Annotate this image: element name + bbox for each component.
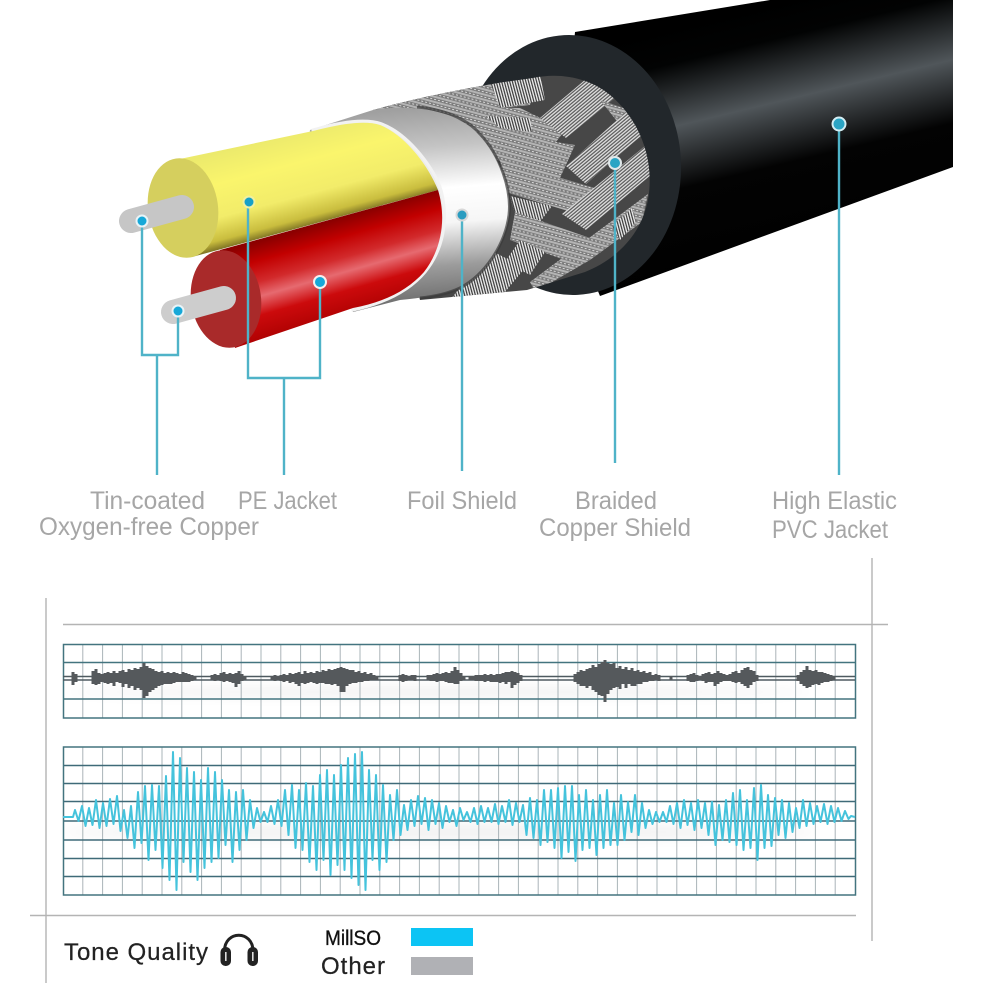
jacket end ring [454, 29, 688, 301]
callout: tin-coated copper [136, 216, 184, 475]
label: braided copper shield [539, 487, 691, 542]
red conductor [185, 190, 442, 352]
callout: PVC jacket [832, 118, 846, 475]
callout: PE jacket [244, 196, 326, 475]
foil shield [300, 108, 509, 312]
chart: other cable waveform [63, 644, 856, 718]
tinned wire top [131, 207, 182, 221]
label: PVC jacket: PVC Jacket [772, 516, 888, 544]
label: tin-coated copper: Tin-coated [90, 487, 205, 515]
chart: MillISO cable waveform [60, 747, 856, 895]
yellow end face [141, 154, 225, 262]
label: braided copper shield: Copper Shield [539, 514, 691, 542]
braided copper shield [373, 76, 650, 300]
cable cross-section illustration [131, 0, 953, 352]
callout: braided shield [609, 157, 621, 463]
callout lines and dots [136, 118, 846, 475]
cyan waveform [63, 752, 855, 890]
label: PVC jacket: High Elastic [772, 487, 897, 515]
tone quality heading: Tone Quality [64, 939, 208, 966]
legend row [64, 927, 473, 980]
PVC jacket body [560, 0, 953, 296]
component labels [39, 487, 897, 544]
dark waveform [73, 660, 834, 702]
legend: Other: Other [321, 953, 385, 980]
yellow conductor [141, 123, 438, 262]
label: PVC jacket [772, 487, 897, 544]
legend: Other [321, 953, 473, 980]
label: foil shield: Foil Shield [407, 487, 517, 515]
label: tin-coated copper [39, 487, 259, 541]
red end face [185, 246, 267, 352]
label: tin-coated copper: Oxygen-free Copper [39, 513, 259, 541]
tinned wire bottom [173, 298, 224, 312]
label: braided copper shield: Braided [575, 487, 657, 515]
inner foil rim [313, 121, 444, 310]
legend: MillISO: MillSO [325, 927, 381, 950]
icon: headphones [220, 935, 258, 966]
label: PE jacket: PE Jacket [238, 487, 337, 515]
legend: MillISO [325, 927, 473, 950]
callout: foil shield [456, 210, 468, 471]
